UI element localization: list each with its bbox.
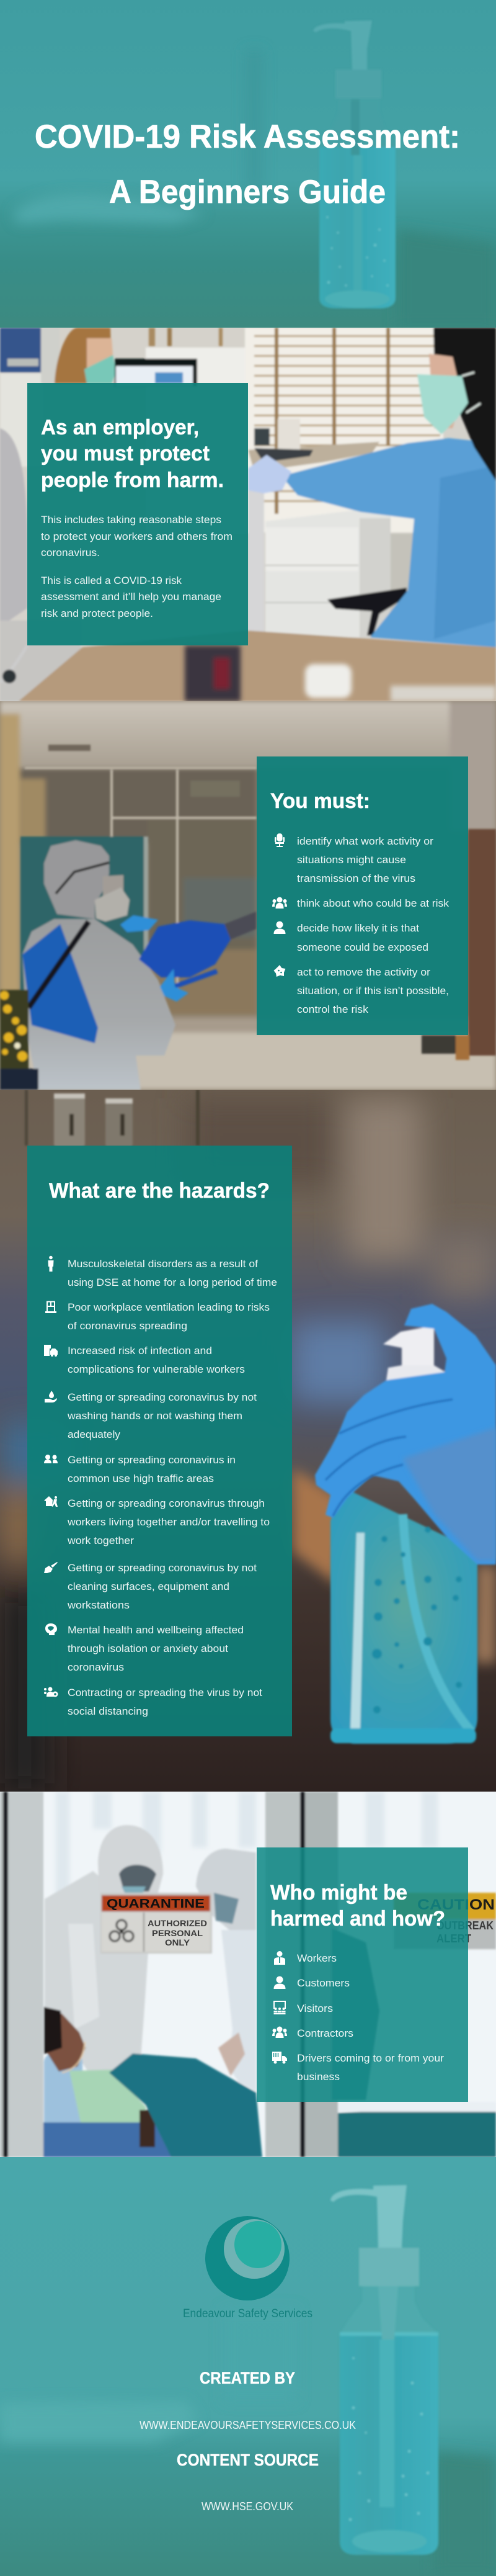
logo: Endeavour Safety Services: Endeavour Safety Services: [183, 2307, 312, 2320]
list item: social distancing: [68, 1687, 262, 1717]
list item: mental health: [68, 1624, 244, 1673]
photo: gloved hand holding sanitiser bottle: [0, 1090, 496, 1793]
icon: customer: [274, 1976, 285, 1989]
icon: worker: [274, 1951, 285, 1965]
list item: identify: identify what work activity or: [297, 835, 433, 847]
heading: harmed and how?: [270, 1907, 445, 1931]
body text: [41, 514, 232, 619]
icon: people and plus: [44, 1687, 58, 1697]
list item: living together: workers living together and/or travelling to: [67, 1516, 270, 1528]
list item: high traffic: [68, 1454, 236, 1484]
hero photo: sanitiser bottle with teal tint: [0, 0, 496, 328]
list item: act to remove: [297, 966, 449, 1015]
text panel: hazards: [27, 1146, 292, 1736]
sign: caution: [417, 1896, 495, 1945]
list item: washing hands: [67, 1391, 257, 1440]
list item: vulnerable workers: Increased risk of infection and: [68, 1345, 212, 1357]
list item: how likely: decide how likely it is that: [297, 922, 419, 934]
list item: high traffic: common use high traffic areas: [68, 1473, 214, 1484]
title: A Beginners Guide: [109, 174, 386, 210]
heading: As an employer,: [41, 416, 199, 439]
body text: risk and protect people.: [41, 608, 153, 619]
sign: caution: ALERT: [436, 1932, 471, 1945]
list item: act to remove: control the risk: [297, 1003, 369, 1015]
list item: vulnerable workers: [68, 1345, 245, 1375]
list item: how likely: [297, 922, 428, 953]
sign: quarantine: PERSONAL: [152, 1928, 203, 1938]
list item: workers: Workers: [297, 1952, 337, 1964]
text panel: as an employer: [27, 383, 248, 645]
credit: content source: CONTENT SOURCE: [177, 2451, 319, 2469]
sign: caution: CAUTION: [417, 1896, 495, 1913]
list item: living together: [67, 1497, 270, 1546]
title: [35, 119, 460, 210]
sign: quarantine: [107, 1897, 207, 1947]
list item: drivers: business: [297, 2071, 340, 2083]
list item: social distancing: Contracting or spreading the virus by not: [68, 1687, 262, 1699]
icon: window ventilation: [45, 1301, 56, 1313]
heading: you must protect: [41, 442, 210, 465]
list item: cleaning: Getting or spreading coronavirus by not: [68, 1562, 257, 1574]
heading: What are the hazards?: [49, 1179, 270, 1203]
body text: This is called a COVID-19 risk: [41, 575, 182, 586]
text panel: who might be harmed: [257, 1847, 468, 2102]
icon: hand with water drop: [45, 1391, 57, 1402]
heading: [270, 1881, 445, 1931]
credit: source website: WWW.HSE.GOV.UK: [202, 2500, 293, 2513]
icon: house and running person: [44, 1496, 58, 1507]
icon: head with brain: [45, 1623, 57, 1635]
list item: identify: transmission of the virus: [297, 873, 415, 884]
sign: quarantine: AUTHORIZED: [148, 1918, 207, 1928]
list item: how likely: someone could be exposed: [297, 941, 428, 953]
logo: Endeavour Safety Services: [183, 2216, 312, 2320]
icon: two people: [44, 1455, 58, 1463]
list item: musculoskeletal: [68, 1258, 277, 1288]
list item: living together: Getting or spreading coronavirus through: [68, 1497, 265, 1509]
list item: musculoskeletal: using DSE at home for a long period of time: [68, 1277, 277, 1288]
body text: to protect your workers and others from: [41, 531, 232, 542]
icon: broom: [44, 1562, 58, 1573]
icon: virus star: [274, 965, 285, 977]
list item: washing hands: washing hands or not washing them: [67, 1410, 242, 1422]
credit: website: WWW.ENDEAVOURSAFETYSERVICES.CO.UK: [140, 2419, 356, 2431]
list item: identify: situations might cause: [297, 854, 406, 866]
credit: created by: CREATED BY: [200, 2369, 295, 2387]
list item: visitors: Visitors: [297, 2003, 333, 2014]
list item: social distancing: social distancing: [68, 1705, 148, 1717]
list item: washing hands: adequately: [68, 1429, 121, 1440]
list item: musculoskeletal: Musculoskeletal disorders as a result of: [68, 1258, 258, 1270]
icon: building and car: [44, 1345, 58, 1357]
list item: drivers: [297, 2052, 444, 2083]
body text: coronavirus.: [41, 547, 100, 559]
heading: people from harm.: [41, 469, 224, 492]
panel: hazards section: [0, 1090, 496, 1793]
list item: act to remove: act to remove the activity or: [297, 966, 430, 978]
list item: cleaning: [67, 1562, 257, 1611]
list item: ventilation: [68, 1301, 270, 1332]
icon: visitors at presentation: [274, 2001, 285, 2014]
list item: high traffic: Getting or spreading coronavirus in: [68, 1454, 236, 1466]
title: COVID-19 Risk Assessment:: [35, 119, 460, 155]
list item: contractors: Contractors: [297, 2027, 353, 2039]
list item: vulnerable workers: complications for vulnerable workers: [68, 1363, 245, 1375]
heading: You must:: [270, 789, 370, 813]
list item: living together: work together: [67, 1535, 134, 1546]
photo: quarantine ward with medics: [0, 1792, 496, 2157]
icon: standing person: [48, 1256, 53, 1272]
sign: quarantine: QUARANTINE: [107, 1897, 205, 1911]
list item: act to remove: situation, or if this isn’t possible,: [297, 985, 449, 997]
list item: washing hands: Getting or spreading coronavirus by not: [68, 1391, 257, 1403]
list item: mental health: Mental health and wellbeing affected: [68, 1624, 244, 1636]
list item: mental health: through isolation or anxiety about: [68, 1643, 228, 1654]
panel: hero banner: [0, 0, 496, 328]
icon: group of people: [272, 897, 287, 909]
text panel: you must: [257, 756, 468, 1035]
panel: who might be harmed section: [0, 1792, 496, 2157]
list item: cleaning: cleaning surfaces, equipment and: [68, 1581, 229, 1592]
panel: you must section: [0, 701, 496, 1090]
office photo: masked workers: [0, 328, 496, 701]
list item: identify: [297, 835, 433, 884]
list item: mental health: coronavirus: [68, 1661, 124, 1673]
icon: office chair: [275, 833, 285, 847]
body text: assessment and it’ll help you manage: [41, 591, 221, 603]
icon: person: [274, 921, 285, 934]
list item: customers: Customers: [297, 1977, 350, 1989]
list item: ventilation: of coronavirus spreading: [68, 1320, 187, 1332]
photo: worker spraying disinfectant: [0, 701, 496, 1090]
icon: contractors: [272, 2027, 287, 2038]
sign: quarantine: ONLY: [165, 1937, 190, 1947]
heading: [41, 416, 224, 492]
panel: employer duty section: [0, 328, 496, 701]
heading: Who might be: [270, 1881, 407, 1905]
footer photo: sanitiser bottle with teal tint: [0, 2157, 496, 2576]
icon: delivery truck: [272, 2052, 287, 2064]
list item: drivers: Drivers coming to or from your: [297, 2052, 444, 2064]
list item: who could be at risk: think about who could be at risk: [297, 897, 449, 909]
panel: footer credits: [0, 2157, 496, 2576]
body text: This includes taking reasonable steps: [41, 514, 221, 526]
list item: ventilation: Poor workplace ventilation leading to risks: [68, 1301, 270, 1313]
list item: cleaning: workstations: [67, 1599, 130, 1611]
